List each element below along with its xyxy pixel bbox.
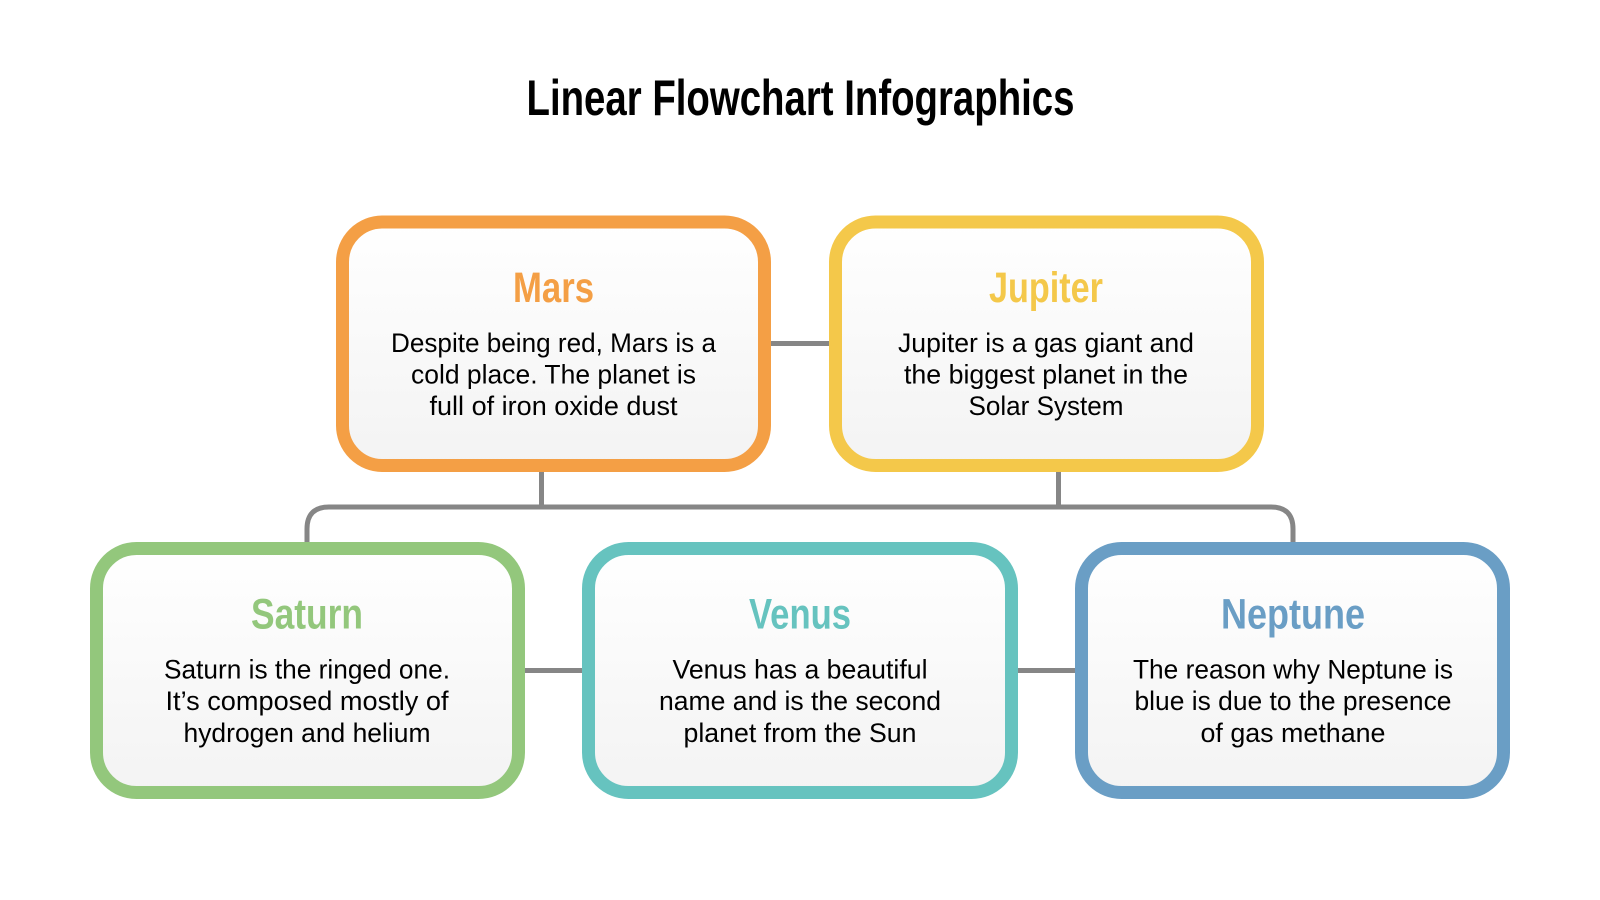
connectors — [307, 344, 1293, 670]
text: Saturn description: It’s composed mostly of — [166, 686, 449, 716]
text: Saturn description: Saturn is the ringed one. — [164, 654, 450, 684]
text: Jupiter description: Jupiter is a gas giant and — [898, 328, 1194, 358]
text: Venus description: name and is the second — [659, 686, 941, 716]
text: Neptune description: The reason why Neptune is — [1133, 654, 1453, 684]
panel: Mars — [342, 222, 764, 466]
heading: Neptune: Neptune — [1221, 590, 1365, 638]
text: Jupiter description: Solar System — [968, 391, 1124, 421]
text: Jupiter description — [898, 328, 1194, 421]
text: Neptune description: blue is due to the presence — [1134, 686, 1452, 716]
text: Jupiter description: the biggest planet in the — [904, 360, 1188, 390]
text: Venus description: planet from the Sun — [684, 718, 916, 748]
heading: Venus: Venus — [749, 590, 851, 638]
panel: Neptune — [1082, 548, 1504, 792]
text: Saturn description — [164, 654, 450, 748]
text: Mars description: full of iron oxide dust — [430, 391, 678, 421]
card: Mars — [342, 222, 764, 466]
text: Neptune description: of gas methane — [1200, 718, 1386, 748]
text: Mars description: cold place. The planet is — [411, 360, 696, 390]
heading: Saturn: Saturn — [251, 590, 363, 638]
title: Linear Flowchart Infographics — [526, 70, 1074, 126]
card: Venus — [588, 548, 1012, 792]
text: Mars description — [391, 328, 717, 421]
panel: Venus — [588, 548, 1012, 792]
panel: Jupiter — [836, 222, 1258, 466]
text: Venus description: Venus has a beautiful — [672, 654, 928, 684]
card: Jupiter — [836, 222, 1258, 466]
text: Venus description — [659, 654, 941, 748]
heading: Jupiter: Jupiter — [989, 264, 1103, 312]
card: Saturn — [96, 548, 518, 792]
panel: Saturn — [96, 548, 518, 792]
text: Mars description: Despite being red, Mars is a — [391, 328, 717, 358]
text: Saturn description: hydrogen and helium — [184, 718, 430, 748]
card: Neptune — [1082, 548, 1504, 792]
heading: Mars: Mars — [513, 264, 594, 312]
text: Neptune description — [1133, 654, 1453, 748]
